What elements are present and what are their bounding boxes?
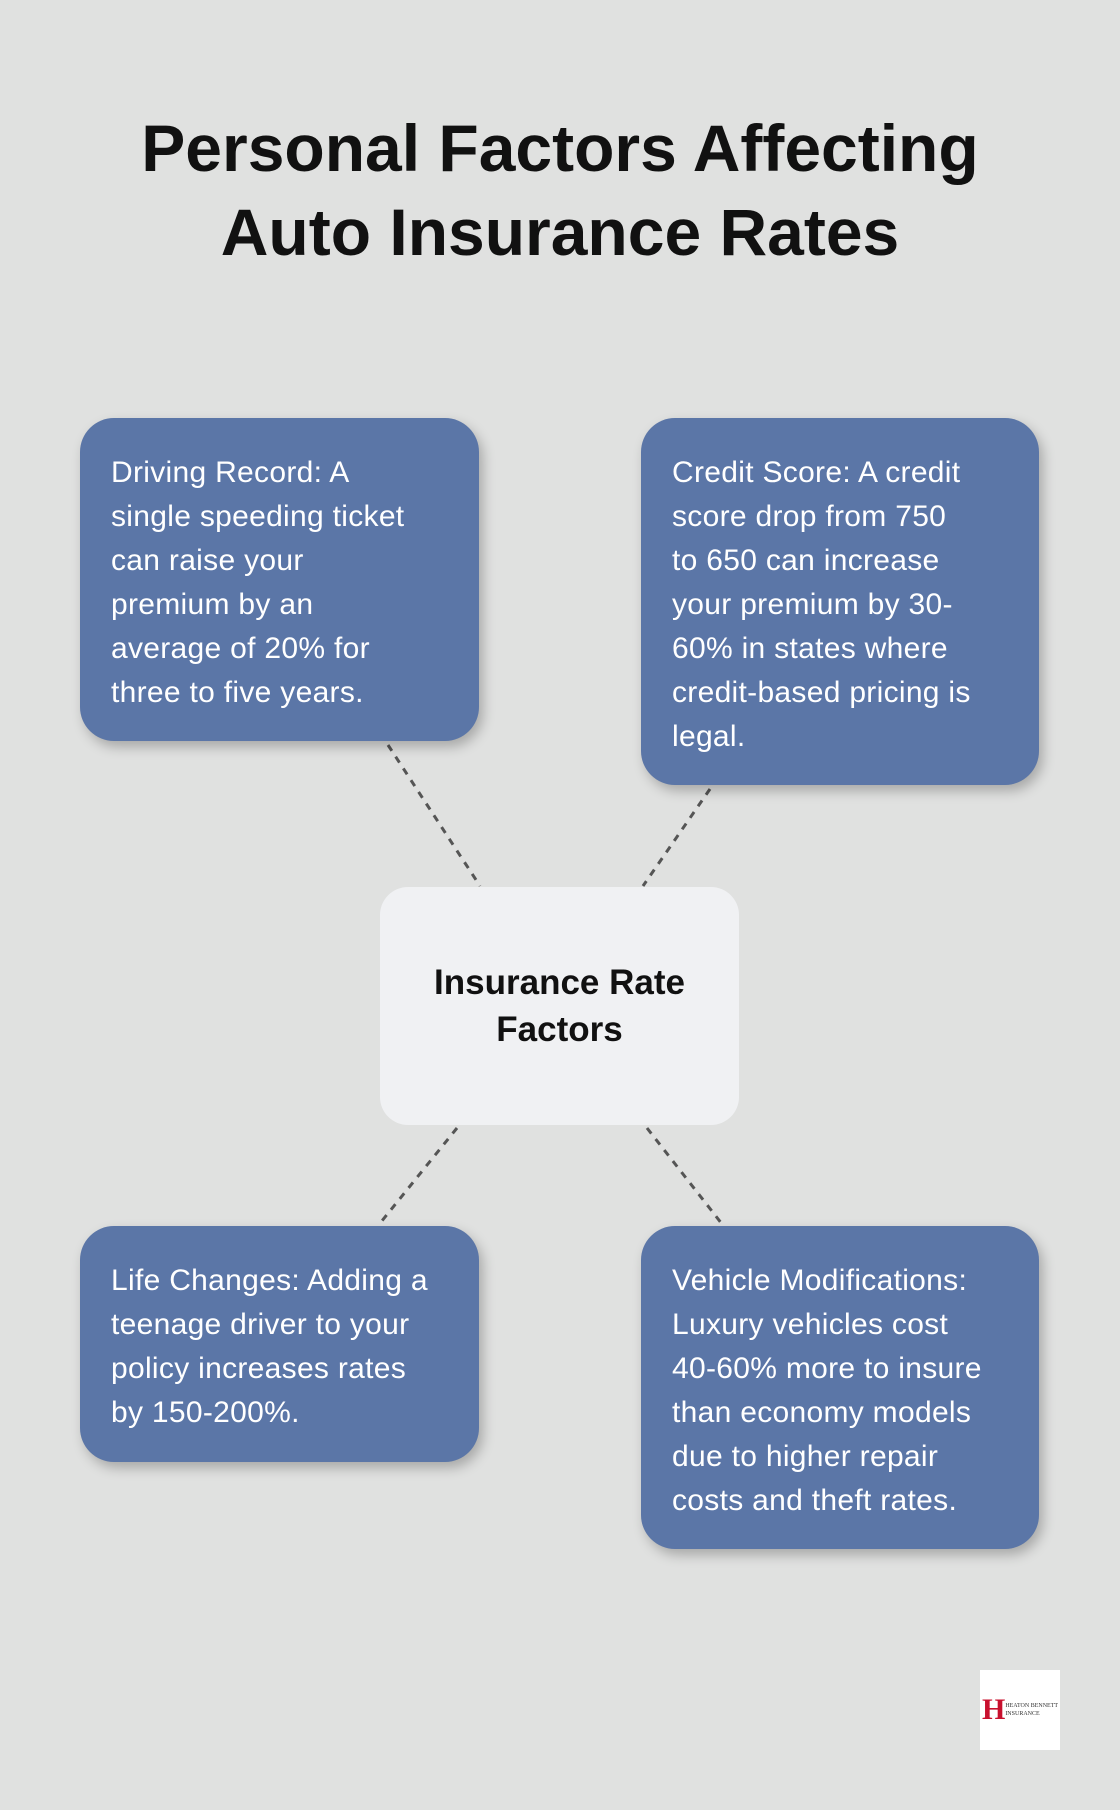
panel: credit score: score drop from 750 bbox=[672, 500, 946, 533]
logo: INSURANCE bbox=[1005, 1711, 1040, 1717]
panel: driving record: three to five years. bbox=[111, 676, 364, 709]
panel: life changes: policy increases rates bbox=[111, 1352, 406, 1385]
title: Auto Insurance Rates bbox=[221, 195, 899, 269]
panel: credit score: to 650 can increase bbox=[672, 544, 940, 577]
center node: Insurance Rate bbox=[434, 963, 685, 1002]
logo bbox=[980, 1670, 1060, 1750]
panel: driving record bbox=[80, 418, 479, 741]
panel: credit score: Credit Score: A credit bbox=[672, 456, 960, 489]
title: Personal Factors Affecting bbox=[141, 111, 979, 185]
panel: vehicle modifications: 40-60% more to insure bbox=[672, 1352, 982, 1385]
panel: vehicle modifications: Vehicle Modifications: bbox=[672, 1264, 967, 1297]
panel: vehicle modifications: costs and theft rates. bbox=[672, 1484, 957, 1517]
panel: life changes: Life Changes: Adding a bbox=[111, 1264, 428, 1297]
panel: driving record: can raise your bbox=[111, 544, 304, 577]
panel: vehicle modifications: than economy models bbox=[672, 1396, 971, 1429]
panel: driving record: Driving Record: A bbox=[111, 456, 350, 489]
center node bbox=[380, 887, 739, 1125]
panel: driving record: single speeding ticket bbox=[111, 500, 404, 533]
panel: credit score: your premium by 30- bbox=[672, 588, 953, 621]
panel: vehicle modifications: due to higher repair bbox=[672, 1440, 938, 1473]
panel: credit score bbox=[641, 418, 1039, 785]
logo: HEATON BENNETT bbox=[1005, 1703, 1058, 1709]
logo: H bbox=[982, 1693, 1005, 1726]
panel: vehicle modifications: Luxury vehicles cost bbox=[672, 1308, 948, 1341]
panel: credit score: credit-based pricing is bbox=[672, 676, 971, 709]
panel: vehicle modifications bbox=[641, 1226, 1039, 1549]
center node: Factors bbox=[496, 1010, 623, 1049]
panel: credit score: legal. bbox=[672, 720, 746, 753]
panel: life changes: teenage driver to your bbox=[111, 1308, 409, 1341]
panel: life changes bbox=[80, 1226, 479, 1462]
panel: driving record: premium by an bbox=[111, 588, 313, 621]
panel: driving record: average of 20% for bbox=[111, 632, 370, 665]
panel: life changes: by 150-200%. bbox=[111, 1396, 300, 1429]
title bbox=[141, 111, 979, 269]
panel: credit score: 60% in states where bbox=[672, 632, 948, 665]
